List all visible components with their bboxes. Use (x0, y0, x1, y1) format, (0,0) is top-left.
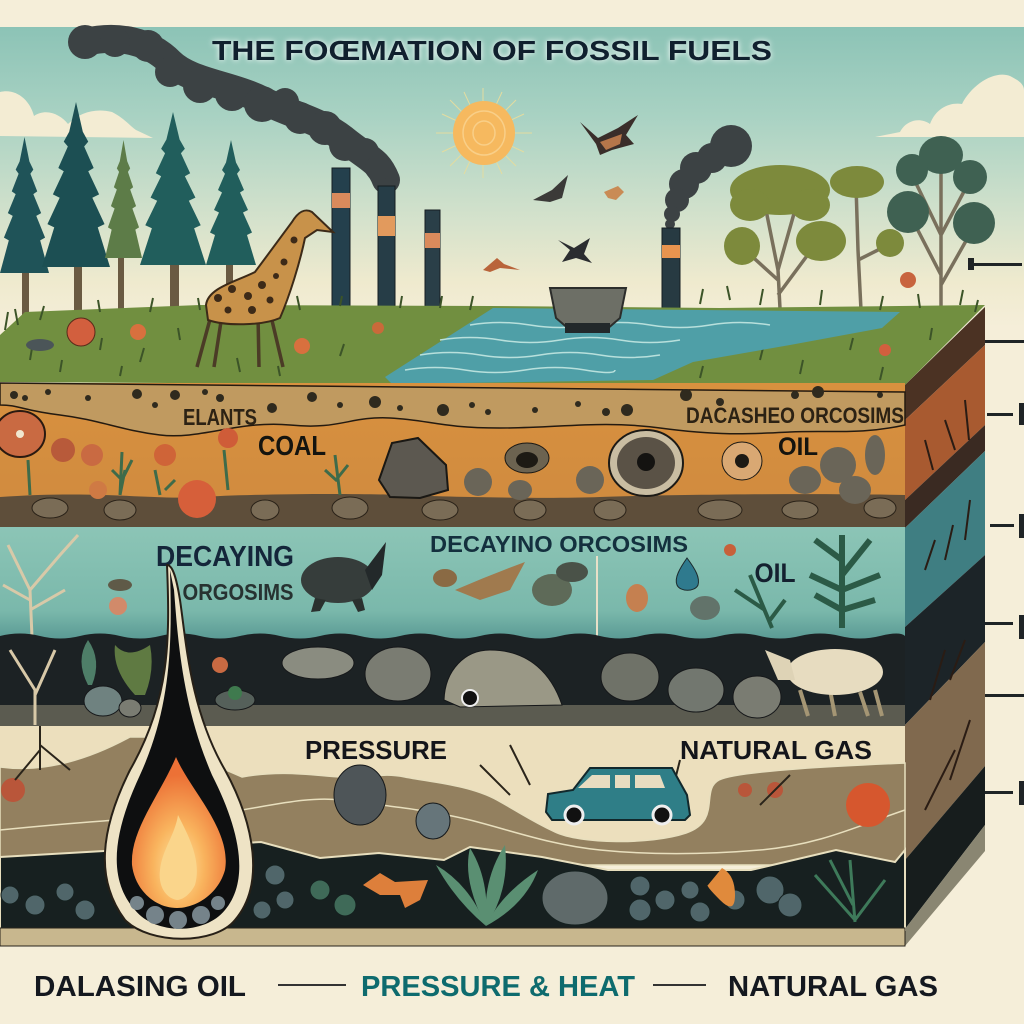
icon: sheep (765, 649, 883, 716)
icon: sunken vessel (550, 288, 626, 333)
smoke plume: right factory (664, 125, 752, 229)
icon: car (546, 768, 690, 824)
grass tufts (5, 286, 978, 380)
panel: sky (0, 27, 1024, 327)
flying creatures (483, 115, 638, 272)
caption: pressure and heat: PRESSURE & HEAT (361, 971, 635, 1003)
right trees (724, 136, 995, 330)
forest: conifers (0, 102, 256, 330)
label: coal: COAL (258, 430, 326, 461)
caption: natural gas: NATURAL GAS (728, 971, 938, 1003)
bottom caption (34, 971, 938, 1003)
label: oil teal layer: OIL (754, 558, 796, 588)
panel: block right side (905, 307, 985, 946)
panel: dark rock layer (0, 634, 905, 726)
label: decaying: DECAYING (156, 541, 294, 573)
factory chimneys (332, 168, 680, 332)
surface flowers and rocks (26, 272, 916, 356)
panel: dark bottom layer (0, 842, 905, 930)
caption: oil: DALASING OIL (34, 971, 246, 1003)
icon: turtle (301, 542, 386, 612)
strip: sediment base (0, 928, 905, 946)
icon: giraffe (197, 210, 333, 367)
label: elants: ELANTS (183, 404, 257, 430)
title: THE FOŒMATION OF FOSSIL FUELS (212, 35, 772, 66)
smoke plume: left factories (68, 25, 391, 181)
icon: oil drop with flame (105, 565, 253, 939)
fossil: spiral shell (609, 430, 683, 496)
panel: beige pressure layer (0, 726, 905, 865)
label: decaying organisms centre: DECAYINO ORCOSIMS (430, 531, 688, 557)
cloud: left (0, 91, 153, 138)
title: THE FOŒMATION OF FOSSIL FUELS (212, 35, 772, 66)
label: organisms: ORGOSIMS (182, 579, 294, 605)
panel: ground surface grass (0, 305, 985, 385)
label: natural gas: NATURAL GAS (680, 735, 872, 765)
label: decaying organisms: DACASHEO ORCOSIMS (686, 403, 904, 428)
panel: teal organisms layer (0, 527, 905, 705)
cloud: right (875, 75, 1024, 137)
scale ticks on right (968, 258, 1024, 805)
label: oil: OIL (778, 433, 818, 461)
water (385, 308, 900, 384)
panel: orange coal layer (0, 383, 905, 528)
icon: sun (436, 88, 532, 178)
fossil: left flower (0, 411, 45, 457)
label: pressure: PRESSURE (305, 735, 447, 765)
